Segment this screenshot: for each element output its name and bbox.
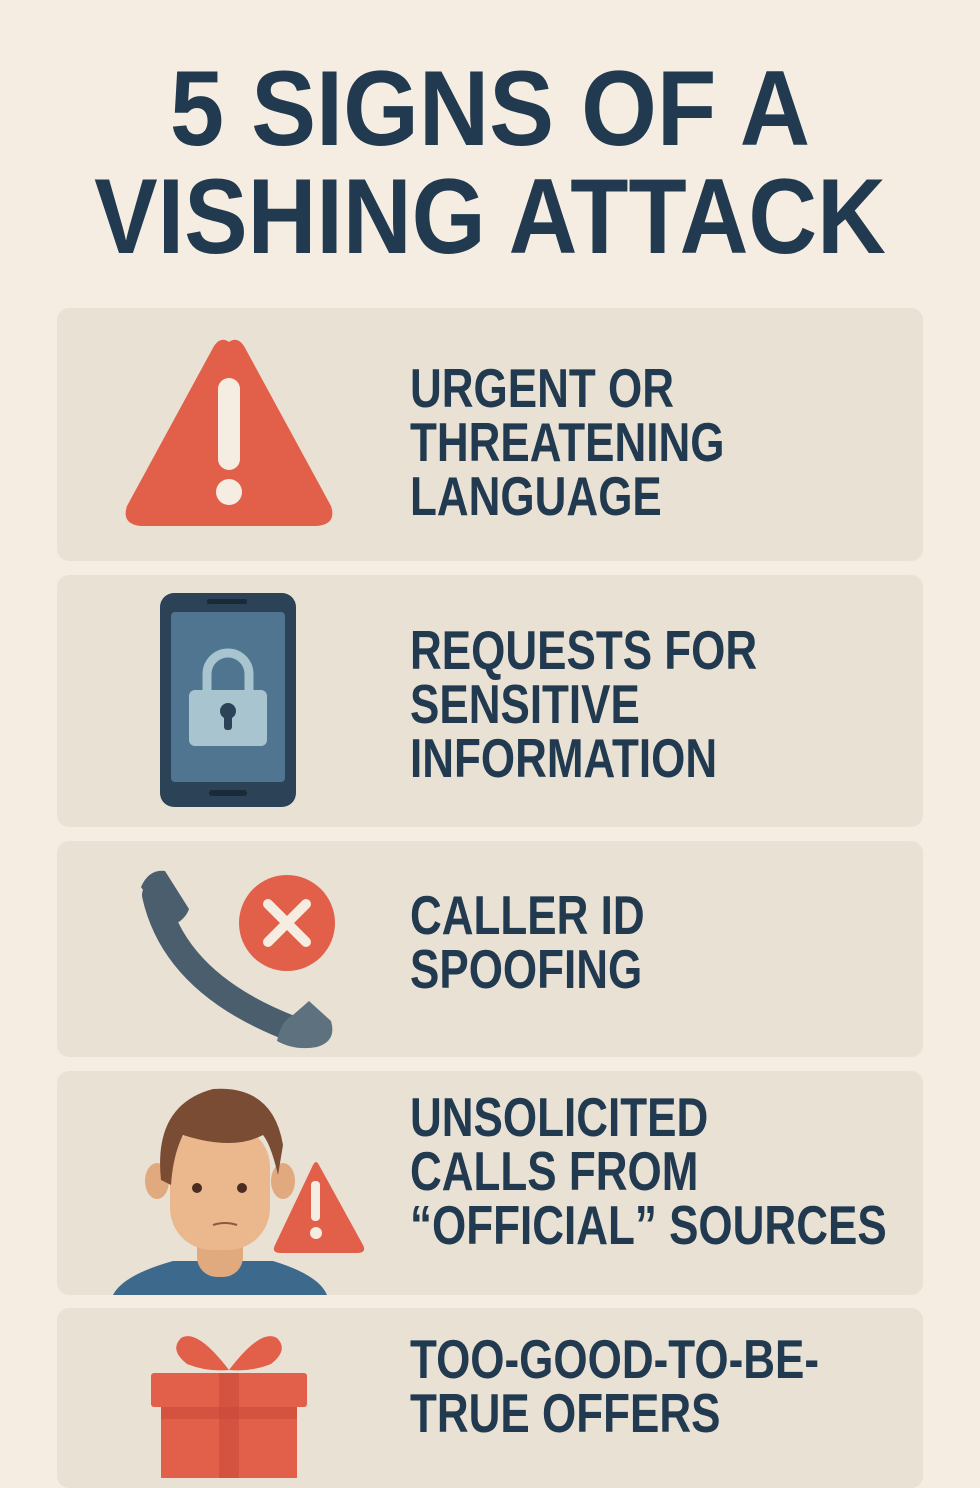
text [410,1086,887,1256]
title: VISHING ATTACK [94,156,886,276]
text [410,884,645,1000]
panel: urgent language [57,308,923,561]
panel: too good offers [57,1308,923,1488]
icon: phone handset with x [141,870,335,1048]
icon: gift box [151,1336,307,1478]
text: LANGUAGE [410,465,662,527]
text [410,619,757,789]
title: 5 SIGNS OF A [170,48,810,168]
panel: caller id spoofing [57,841,923,1057]
icon: warning triangle [126,340,332,526]
text: TRUE OFFERS [410,1382,720,1444]
text: SPOOFING [410,938,642,1000]
text: CALLS FROM [410,1140,698,1202]
text [410,1328,819,1444]
text: CALLER ID [410,884,645,946]
text: REQUESTS FOR [410,619,757,681]
text: SENSITIVE [410,673,640,735]
text: TOO-GOOD-TO-BE- [410,1328,819,1390]
panel: sensitive information [57,575,923,827]
text: THREATENING [410,411,725,473]
text [410,357,725,527]
icon: person with warning [113,1088,364,1295]
text: UNSOLICITED [410,1086,708,1148]
text: “OFFICIAL” SOURCES [410,1194,887,1256]
panel: unsolicited calls [57,1071,923,1295]
icon: phone with lock [160,593,296,807]
text: INFORMATION [410,727,717,789]
text: URGENT OR [410,357,674,419]
title [94,48,886,276]
